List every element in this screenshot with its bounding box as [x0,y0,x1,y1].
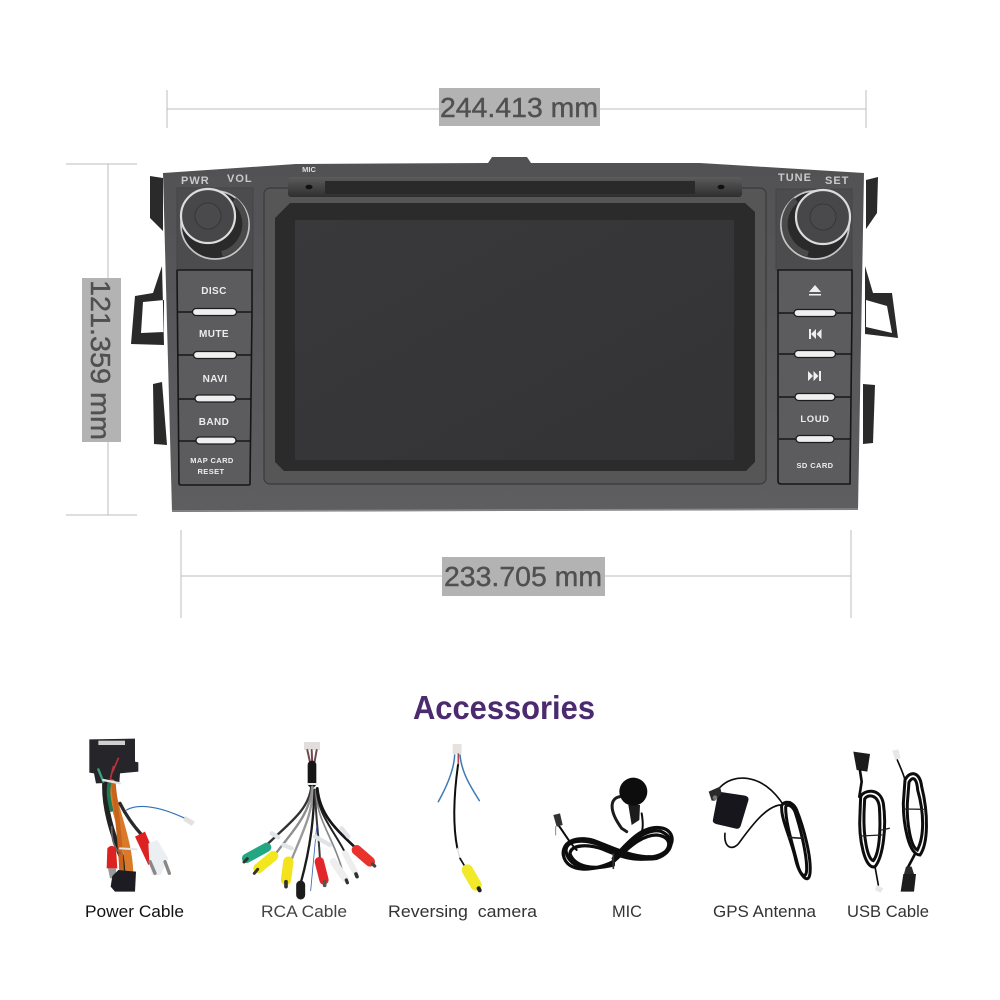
label: Reversing camera [388,903,538,921]
MIC label: MIC [302,165,316,174]
label: RCA Cable [261,903,347,921]
PWR and VOL labels [181,173,253,187]
accessory: Reversing camera cable [388,744,538,921]
eject icon [809,285,821,296]
left buttons: MAP CARD [190,456,234,465]
accessory: GPS Antenna [709,778,817,921]
label: MIC [612,903,642,921]
left buttons: DISC [201,286,227,297]
right knob [781,190,850,259]
dimension: faceplate width 233.705 mm [181,530,851,618]
TUNE and SET labels: TUNE [778,172,812,184]
left knob [181,189,249,259]
CD slot bar [288,177,742,197]
next icon [808,371,821,381]
accessory: MIC [553,778,672,921]
TUNE and SET labels [778,172,849,187]
touch screen [295,220,734,460]
dimension: height 121.359 mm [66,164,137,515]
PWR and VOL labels: PWR [181,175,210,187]
heading: Accessories: Accessories [413,689,595,726]
screen frame [275,203,755,471]
PWR and VOL labels: VOL [227,173,253,185]
label: GPS Antenna [713,903,817,921]
accessory: USB Cable [847,749,929,921]
left buttons [177,270,252,485]
dimension: faceplate width 233.705 mm: 233.705 mm [444,561,602,592]
left buttons: NAVI [203,374,227,385]
left knob panel [177,173,253,270]
right buttons: LOUD [800,414,830,425]
accessory: Power Cable [85,739,195,921]
faceplate [163,157,864,512]
screen bezel [264,188,766,484]
car stereo head unit [131,157,898,512]
side brackets and hooks [131,176,898,445]
right knob panel [776,172,852,270]
dimension: overall width 244.413 mm: 244.413 mm [440,92,598,123]
right buttons: SD CARD [797,461,834,470]
label: USB Cable [847,903,929,921]
label: Power Cable [85,903,184,921]
left buttons: MUTE [199,329,229,340]
left buttons: BAND [199,417,229,428]
TUNE and SET labels: SET [825,175,849,187]
right buttons [778,270,852,484]
dimension: overall width 244.413 mm [167,88,866,128]
accessory: RCA Cable [244,742,375,921]
previous icon [809,329,822,339]
left buttons: RESET [197,467,225,476]
dimension: height 121.359 mm: 121.359 mm [85,280,116,440]
